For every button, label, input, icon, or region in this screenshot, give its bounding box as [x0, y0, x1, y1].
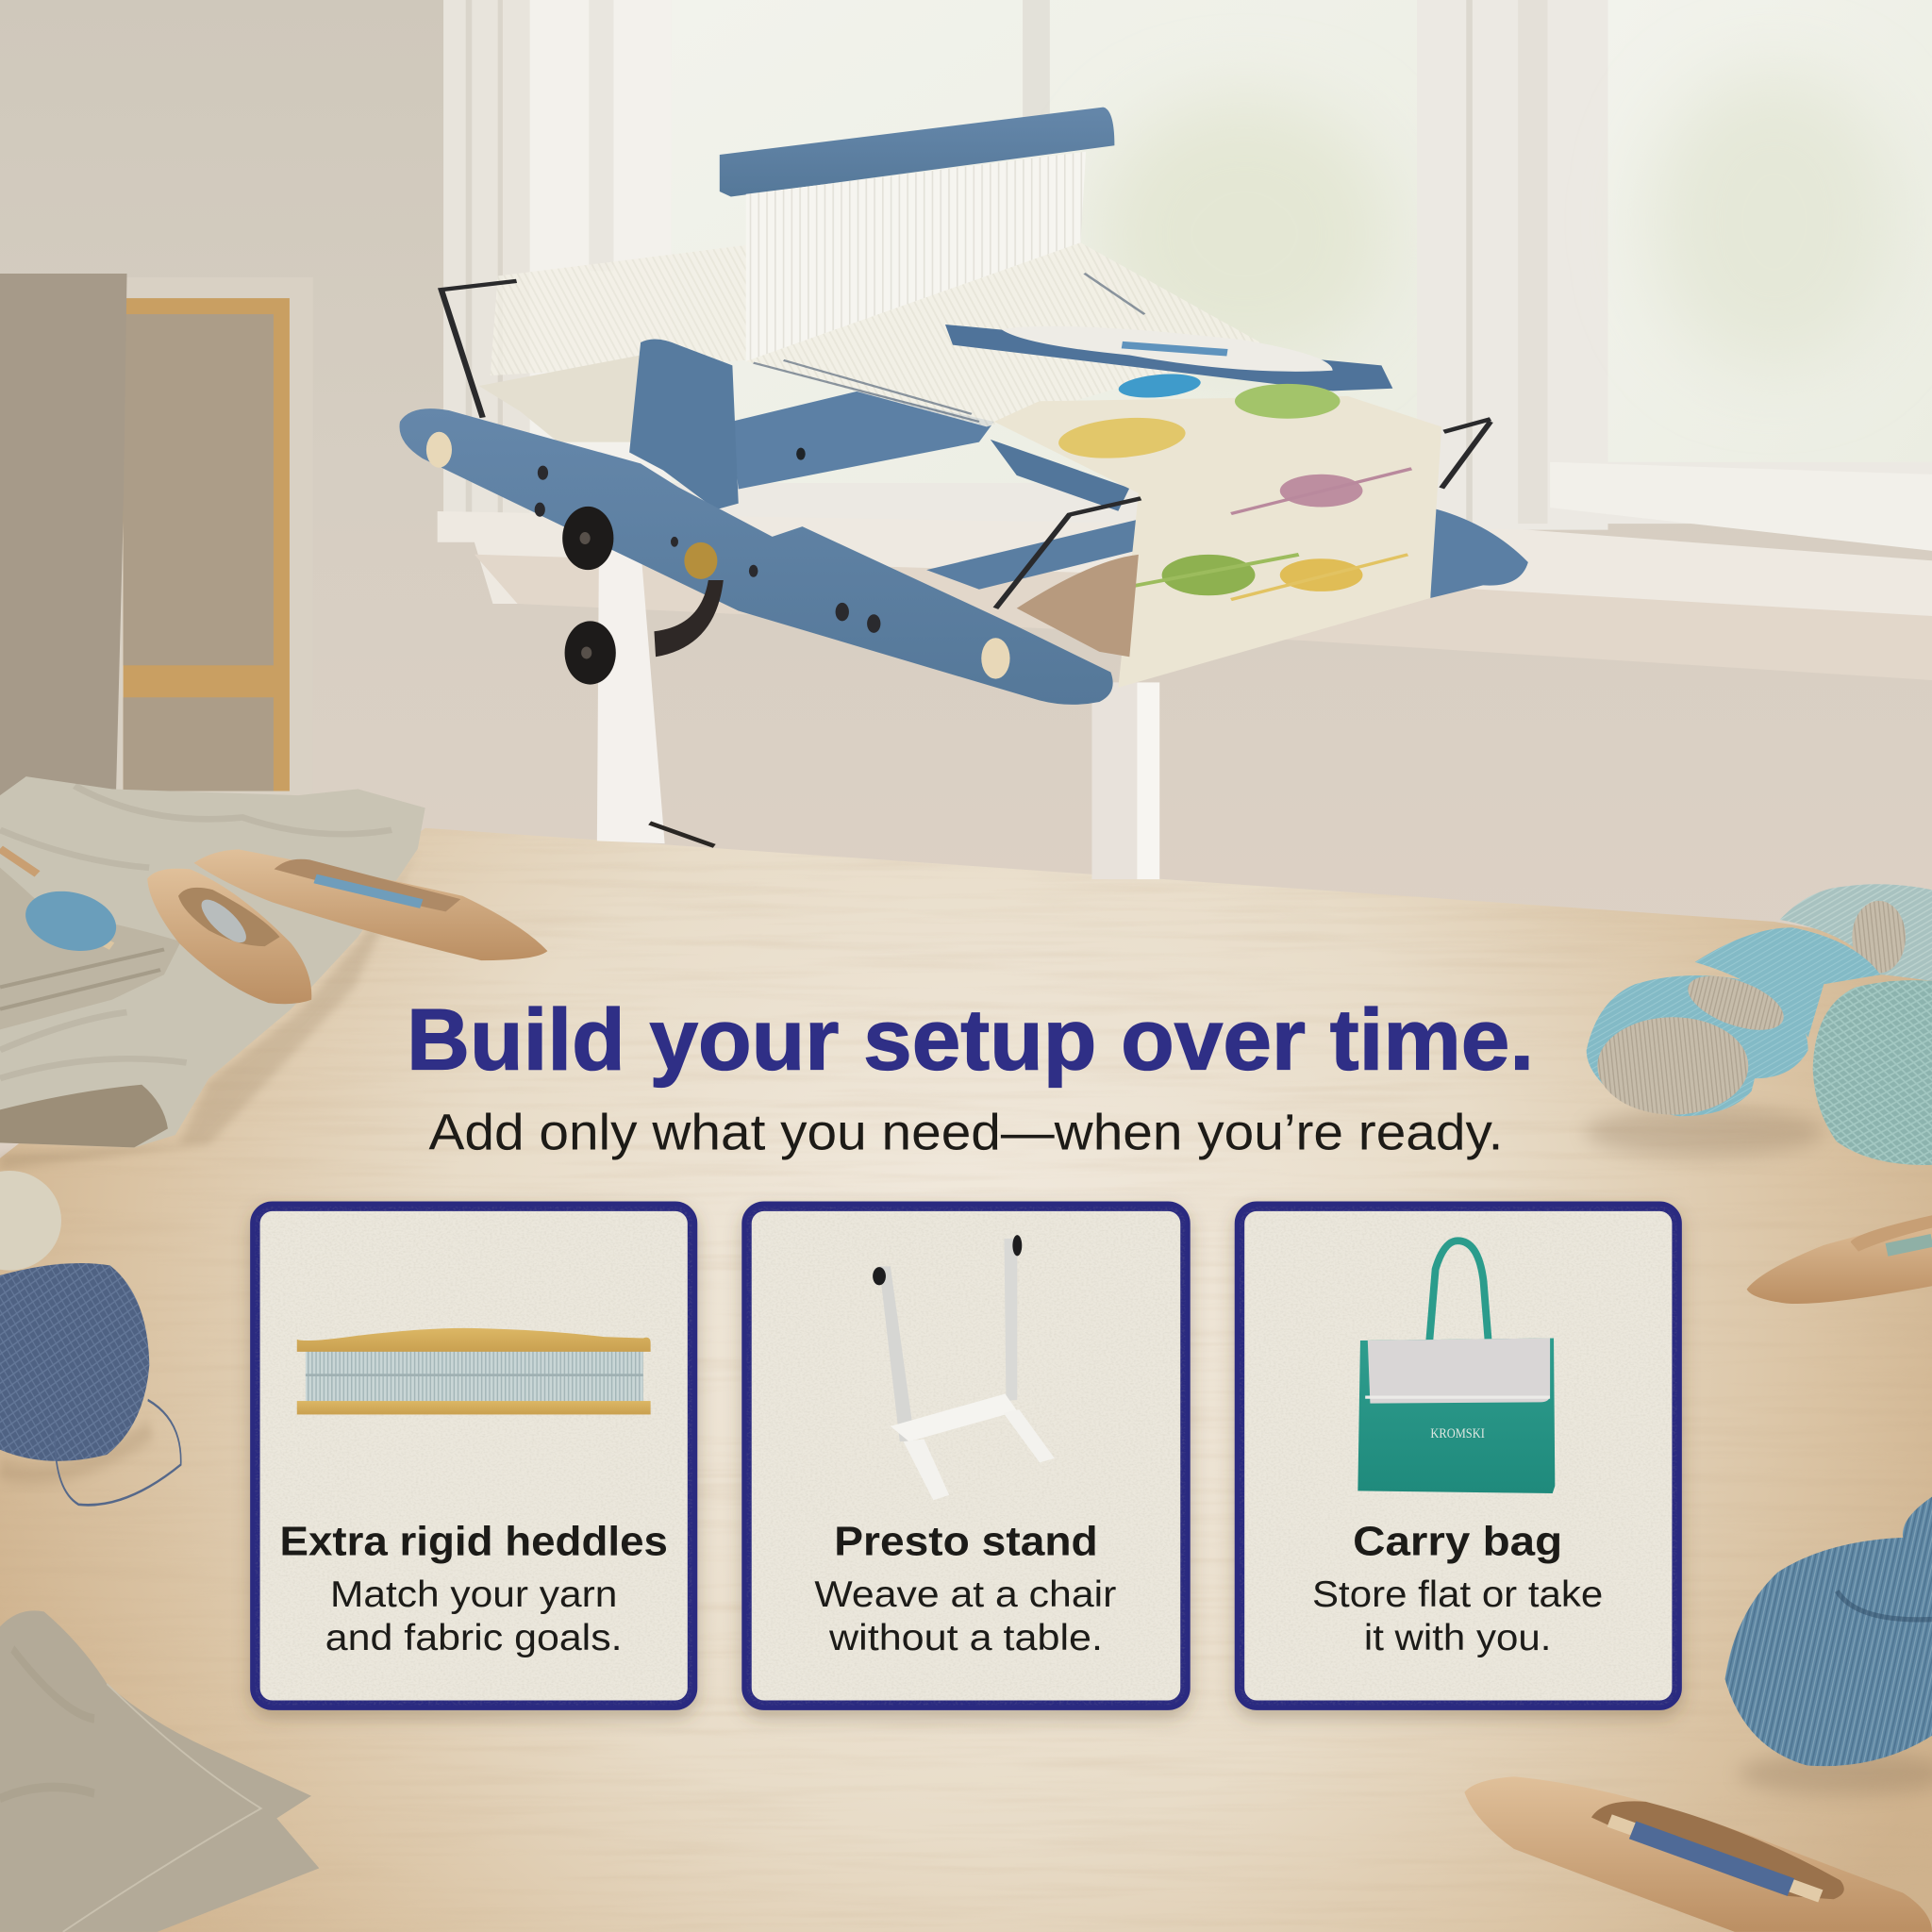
- dowels and holes: [426, 432, 1010, 679]
- shuttle A: [194, 849, 547, 960]
- front hank: [1587, 975, 1808, 1116]
- window: [438, 0, 1932, 680]
- shadow under cloth: [0, 849, 418, 1170]
- top hank: [1780, 884, 1932, 981]
- panel: presto stand: [747, 1207, 1185, 1706]
- left wire: [441, 281, 517, 418]
- shuttle B: [147, 869, 311, 1004]
- description: extra rigid heddles: and fabric goals.: [325, 1618, 623, 1658]
- panel: carry bag: [1240, 1207, 1677, 1706]
- linen cloth: [0, 1610, 319, 1932]
- canvas frame leaning on wall: [113, 277, 313, 794]
- subtitle: Add only what you need—when you’re ready.: [429, 1106, 1503, 1161]
- table: [0, 813, 1932, 1932]
- cross beam: [731, 391, 994, 490]
- description: carry bag: Store flat or take: [1312, 1574, 1603, 1615]
- rear right arm: [991, 440, 1129, 511]
- hank: [1724, 1497, 1932, 1766]
- woven cloth stack: [0, 868, 181, 1029]
- description: extra rigid heddles: Match your yarn: [330, 1574, 617, 1615]
- hanging linen cloth: [0, 274, 127, 801]
- front wires: [995, 419, 1491, 608]
- description: presto stand: Weave at a chair: [814, 1574, 1116, 1615]
- left side frame: [399, 408, 1113, 705]
- blue yarn bobbin: [16, 881, 126, 961]
- brass bolt: [684, 542, 717, 579]
- description: carry bag: [1312, 1574, 1603, 1658]
- back cloth roller: [479, 355, 641, 442]
- icon: carry bag: [1357, 1241, 1555, 1493]
- panel: extra rigid heddles: [255, 1207, 692, 1706]
- stand clip: [650, 823, 714, 846]
- window sill: [438, 511, 1932, 616]
- loom on stand: [399, 108, 1528, 879]
- yarn balls and linen, bottom left: [0, 1171, 319, 1932]
- warp threads, back: [491, 245, 746, 375]
- heddle: [746, 152, 1086, 361]
- description: extra rigid heddles: [325, 1574, 623, 1658]
- heddle beam: [720, 108, 1114, 196]
- upright: [629, 339, 739, 509]
- description: presto stand: without a table.: [828, 1618, 1103, 1658]
- stand right leg: [1091, 682, 1159, 879]
- black knobs: [562, 507, 616, 685]
- tension hook: [654, 580, 724, 657]
- icon: rigid heddle: [297, 1328, 651, 1414]
- description: presto stand: [814, 1574, 1116, 1658]
- yarn hanks and ball, right: [1585, 884, 1932, 1165]
- description: carry bag: it with you.: [1364, 1618, 1551, 1658]
- heading: extra rigid heddles: Extra rigid heddles: [279, 1519, 668, 1564]
- shuttle wooden dowel: [0, 849, 38, 874]
- middle hank: [1695, 927, 1880, 1038]
- cloth: [0, 776, 425, 1147]
- shuttle body: [1464, 1776, 1932, 1932]
- bag logo: KROMSKI: [1430, 1426, 1485, 1441]
- heading: carry bag: Carry bag: [1353, 1519, 1562, 1564]
- navy yarn ball: [0, 1263, 149, 1461]
- warp threads, front: [746, 242, 1265, 426]
- cloth fold underside: [0, 1085, 168, 1147]
- yarn accents on fabric: [1017, 371, 1411, 657]
- heading: presto stand: Presto stand: [834, 1519, 1098, 1564]
- woven fabric: [994, 396, 1441, 688]
- yarn ball: [1813, 980, 1932, 1165]
- stand left leg: [597, 501, 665, 843]
- cloth wrinkles: [0, 786, 391, 1078]
- yarn hank and shuttle, bottom right: [1464, 1497, 1932, 1932]
- shuttle, right: [1747, 1215, 1932, 1304]
- icon: presto stand: [873, 1235, 1055, 1500]
- folded linen and shuttles on table, left: [0, 776, 547, 1170]
- title: Build your setup over time.: [407, 992, 1534, 1089]
- stick shuttle: [945, 325, 1392, 391]
